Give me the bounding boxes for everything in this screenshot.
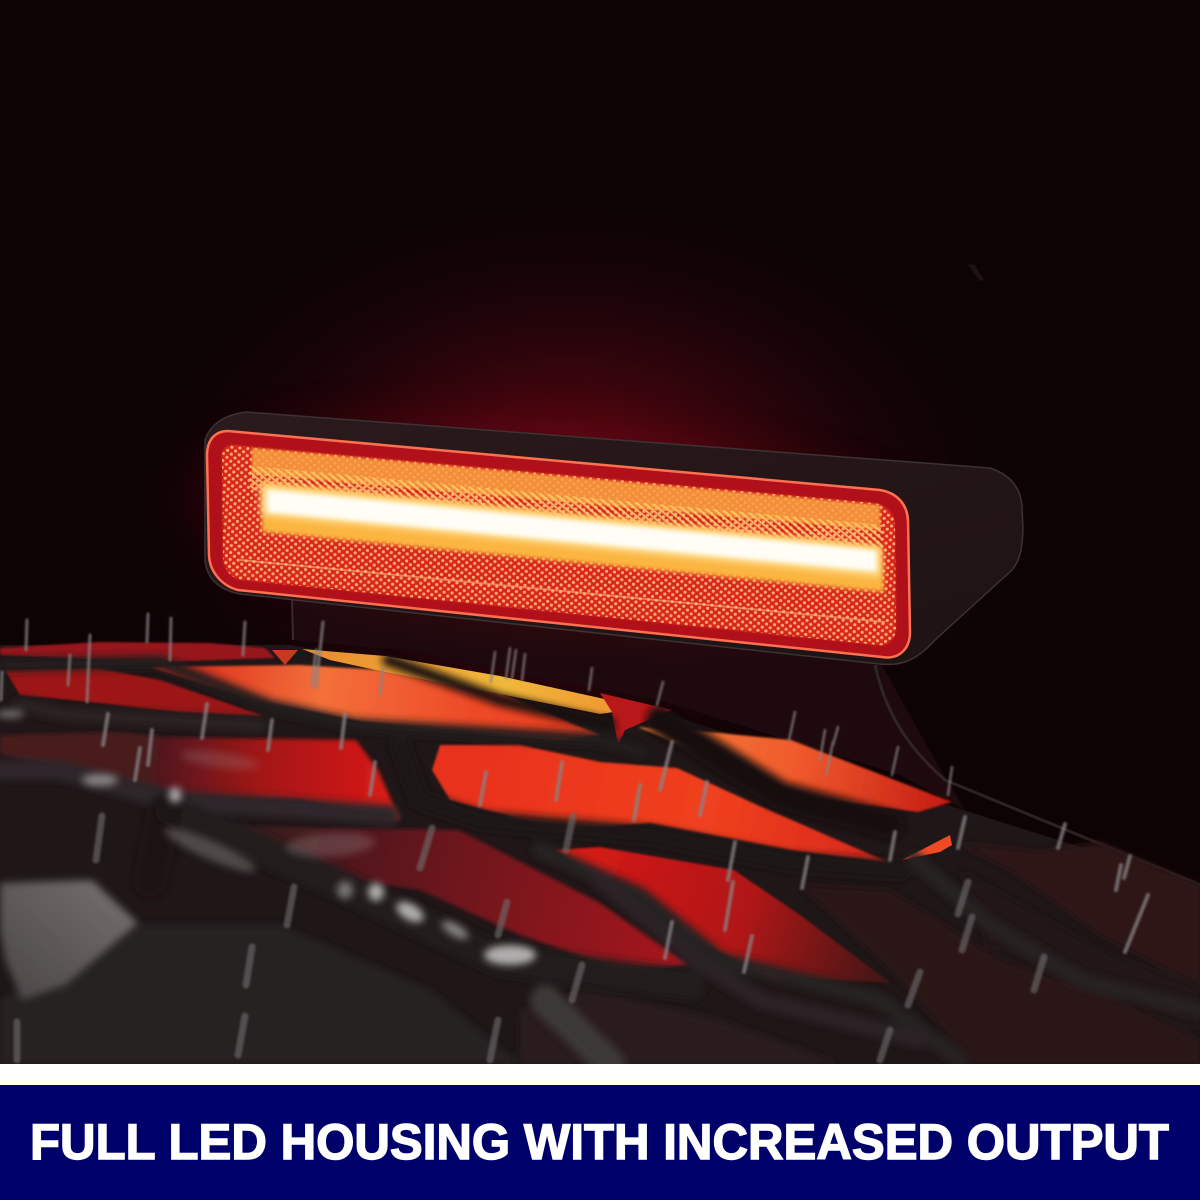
bright amber band [262, 482, 884, 592]
lens red frame [207, 431, 910, 657]
tire studs / siping [1, 614, 1148, 1060]
tread block: bright centre-left [150, 665, 600, 740]
lamp mount stem [292, 598, 1200, 885]
tread block: lower centre [555, 847, 891, 983]
lens inner reflector [222, 445, 896, 645]
upper yellow band [252, 448, 880, 530]
lower reflector line [240, 560, 885, 622]
white hot LED bar [268, 490, 876, 571]
navy caption banner [0, 1085, 1200, 1200]
grey flat tread face [0, 880, 138, 1000]
tread grooves [0, 660, 1200, 1064]
LED third brake light [194, 409, 1023, 664]
worn groove highlights [0, 710, 536, 965]
lamp outer glow [194, 409, 926, 641]
tread block: left red [5, 668, 264, 716]
white divider strip [0, 1064, 1200, 1085]
tread block: top-left row [0, 642, 275, 662]
tread wedge highlight [272, 650, 298, 665]
tread block: centre right [432, 745, 890, 863]
tire tread [0, 614, 1200, 1064]
lower dull tread blocks [0, 842, 1200, 1064]
tread block: mid-left red fading to grey [0, 732, 400, 820]
black housing [205, 412, 1023, 664]
white hot LED bar glow [262, 485, 880, 576]
tread block: narrow yellow edge [302, 649, 640, 714]
lens dimple texture [222, 445, 896, 645]
tread block: large mottled [200, 825, 690, 970]
caption text: FULL LED HOUSING WITH INCREASED OUTPUT [30, 1114, 1169, 1170]
tread block: upper right glow [638, 727, 952, 812]
tire base rubber [0, 645, 1200, 1064]
tread sliver highlight [902, 835, 952, 860]
tread wedge at centre [600, 693, 672, 745]
upper hatch band [250, 466, 882, 552]
